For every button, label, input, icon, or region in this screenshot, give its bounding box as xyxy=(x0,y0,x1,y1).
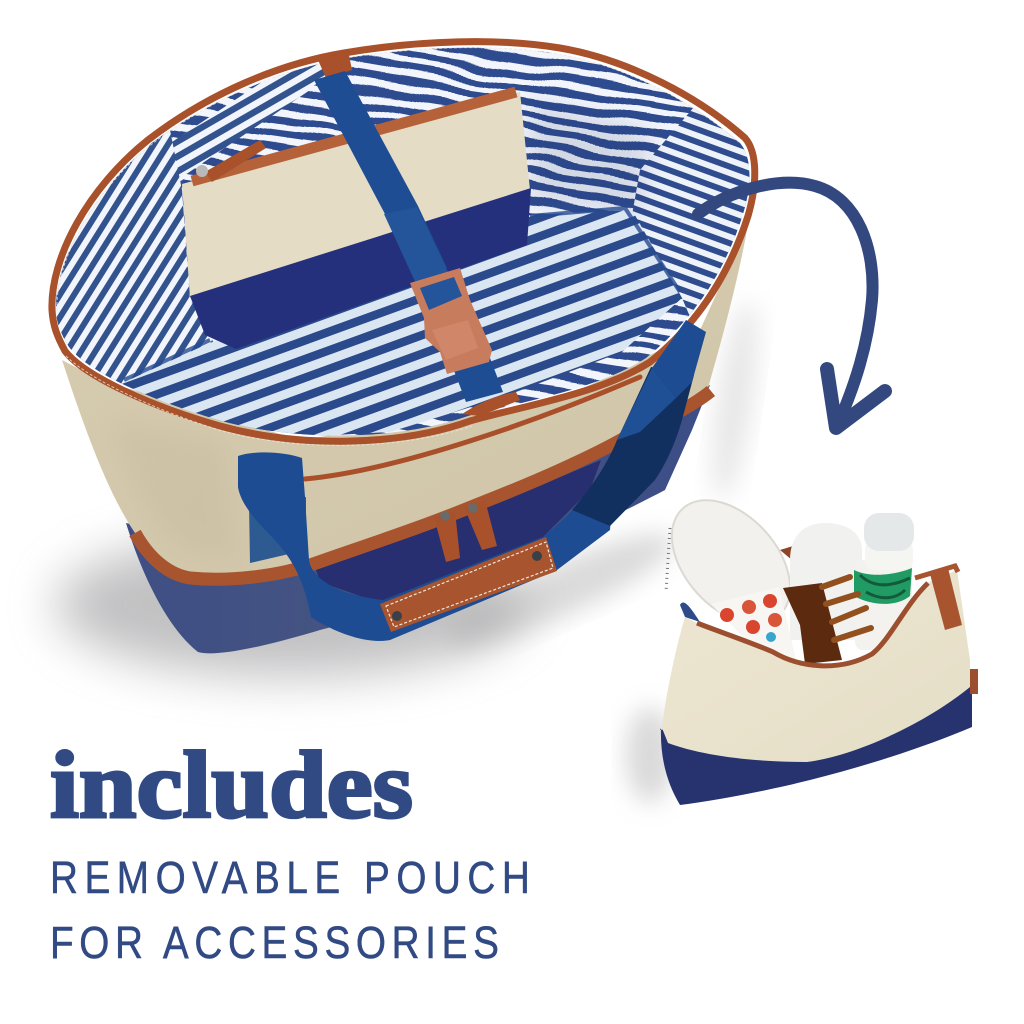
leather rim xyxy=(52,42,755,441)
floor stripes xyxy=(118,210,682,438)
interior blue webbing strap xyxy=(314,71,503,402)
spray can xyxy=(854,513,914,650)
dark lower compartment behind strap xyxy=(316,460,601,603)
handle left strap and bottom band xyxy=(238,452,612,641)
leather patch xyxy=(380,537,557,632)
rim stitching xyxy=(57,48,740,445)
wall shading xyxy=(530,100,650,215)
front piping line xyxy=(305,377,640,479)
pouch zipper xyxy=(697,583,928,666)
pouch back lining sliver xyxy=(680,603,700,622)
tote interior lining xyxy=(56,48,750,436)
zipper pulls xyxy=(434,500,497,562)
lower navy base of tote xyxy=(126,385,710,653)
inner pouch canvas xyxy=(182,92,530,298)
handle back shadow section xyxy=(249,497,306,563)
removable pouch with accessories xyxy=(649,478,978,805)
inner pouch xyxy=(182,92,531,349)
subheading line 2: FOR ACCESSORIES xyxy=(50,917,499,968)
zipper band xyxy=(135,391,711,579)
ground shadow of tote xyxy=(55,298,767,677)
pouch canvas front xyxy=(662,570,970,762)
floor edge xyxy=(124,208,680,380)
back wall stripes xyxy=(56,48,750,436)
subheading line 1: REMOVABLE POUCH xyxy=(50,852,530,903)
rim leather tab xyxy=(318,50,352,78)
carry handle xyxy=(238,320,706,641)
left wall stripes xyxy=(56,130,214,386)
rim front leather tab xyxy=(462,392,520,416)
sticker sheet xyxy=(711,587,796,660)
inner pouch navy base xyxy=(190,188,531,349)
pouch navy base xyxy=(660,676,972,805)
deodorant xyxy=(790,523,862,640)
claw clip xyxy=(783,577,871,664)
inner pouch zip pull xyxy=(205,140,266,182)
canvas shading xyxy=(110,420,240,560)
curved arrow xyxy=(698,183,885,428)
hairbrush xyxy=(649,478,813,646)
buckle xyxy=(410,268,492,374)
tote bag xyxy=(48,38,758,654)
handle upper end xyxy=(652,320,706,398)
inner pouch zipper xyxy=(192,92,516,181)
right wall stripes xyxy=(632,108,750,316)
upper left wall stripes xyxy=(172,64,325,188)
pouch zip pull xyxy=(915,566,962,630)
heading: includes: includes xyxy=(50,732,413,838)
handle dark section xyxy=(572,367,694,526)
pouch back zipper xyxy=(780,546,793,560)
handle mid section xyxy=(617,368,676,440)
pouch side tab xyxy=(970,669,978,694)
pouch ground shadow xyxy=(626,707,674,803)
canvas body of tote xyxy=(62,225,748,575)
